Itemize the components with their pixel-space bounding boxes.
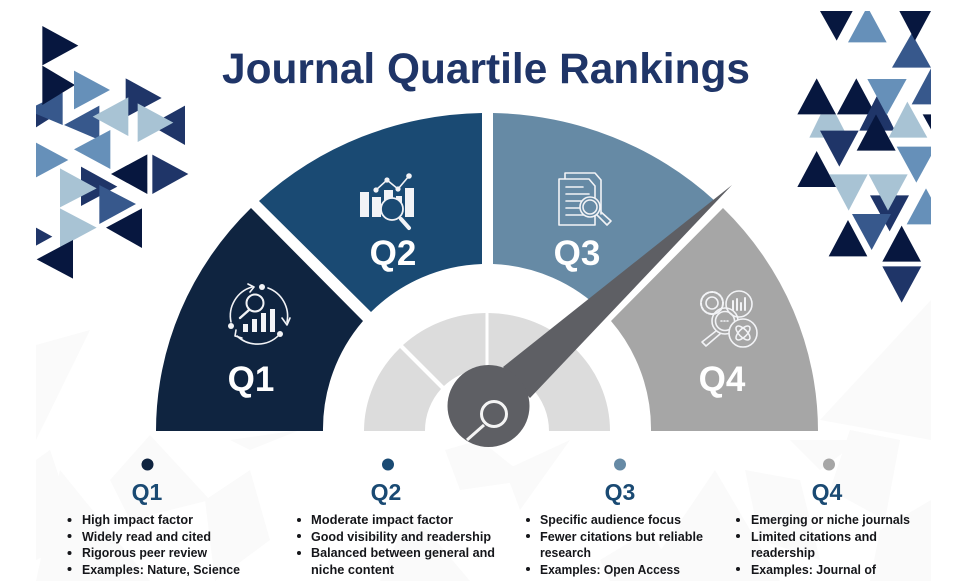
dot: Q3 [614,458,626,470]
list: Q4 bullets: Emerging or niche journals [751,513,910,527]
icon: Q1 cycle chart with magnifier [228,284,290,344]
heading: Q3: Q3 [605,479,635,505]
label: Q3: Q3 [554,234,600,273]
list: Q2 bullets: Balanced between general and [311,546,495,560]
list: Q4 bullets [736,513,910,577]
list: Q1 bullets: High impact factor [82,513,193,527]
title: Journal Quartile Rankings [222,45,750,93]
list: Q3 bullets: Specific audience focus [540,513,681,527]
column: Q3 details [526,458,703,577]
decoration: left triangle cluster [23,26,188,279]
list: Q3 bullets: Fewer citations but reliable [540,530,703,544]
gauge needle pointing between Q3 and Q4 [448,185,732,447]
icon: Q2 bar chart with magnifier [360,173,414,228]
decoration: right triangle cluster [797,11,931,302]
column: Q4 details [736,458,910,577]
list: Q3 bullets [526,513,703,577]
list: Q2 bullets: Good visibility and readership [311,530,491,544]
list: Q1 bullets [68,513,240,577]
list: Q2 bullets: niche content [311,563,395,577]
list: Q3 bullets: Examples: Open Access [540,563,680,577]
list: Q4 bullets: Limited citations and [751,530,877,544]
list: Q2 bullets: Moderate impact factor [311,513,453,527]
list: Q1 bullets: Widely read and cited [82,530,211,544]
list: Q1 bullets: Examples: Nature, Science [82,563,240,577]
segment: Q2 [259,113,482,312]
list: Q4 bullets: readership [751,546,815,560]
heading: Q2: Q2 [371,479,401,505]
list: Q2 bullets [297,513,495,577]
list: Q3 bullets: research [540,546,591,560]
segment: Q4 [611,208,818,431]
heading: Q1: Q1 [132,479,163,505]
icon: Q3 document with magnifier [559,173,611,225]
label: Q1: Q1 [228,360,274,399]
gauge: quartile segments [156,113,818,431]
label: Q2: Q2 [370,234,416,273]
segment: Q1 [156,208,363,431]
column: Q2 details [297,458,495,577]
list: Q1 bullets: Rigorous peer review [82,546,207,560]
dot: Q1 [142,458,154,470]
dot: Q4 [823,458,835,470]
background: faint triangle texture [36,300,931,581]
segment: Q3 [493,113,715,312]
gauge: inner grey segments [364,313,610,431]
icon: Q4 gear, chart, atom and magnifier [701,291,757,347]
list: Q4 bullets: Examples: Journal of [751,563,877,577]
heading: Q4: Q4 [812,479,843,505]
label: Q4: Q4 [699,360,746,399]
column: Q1 details [68,458,240,577]
dot: Q2 [382,458,394,470]
